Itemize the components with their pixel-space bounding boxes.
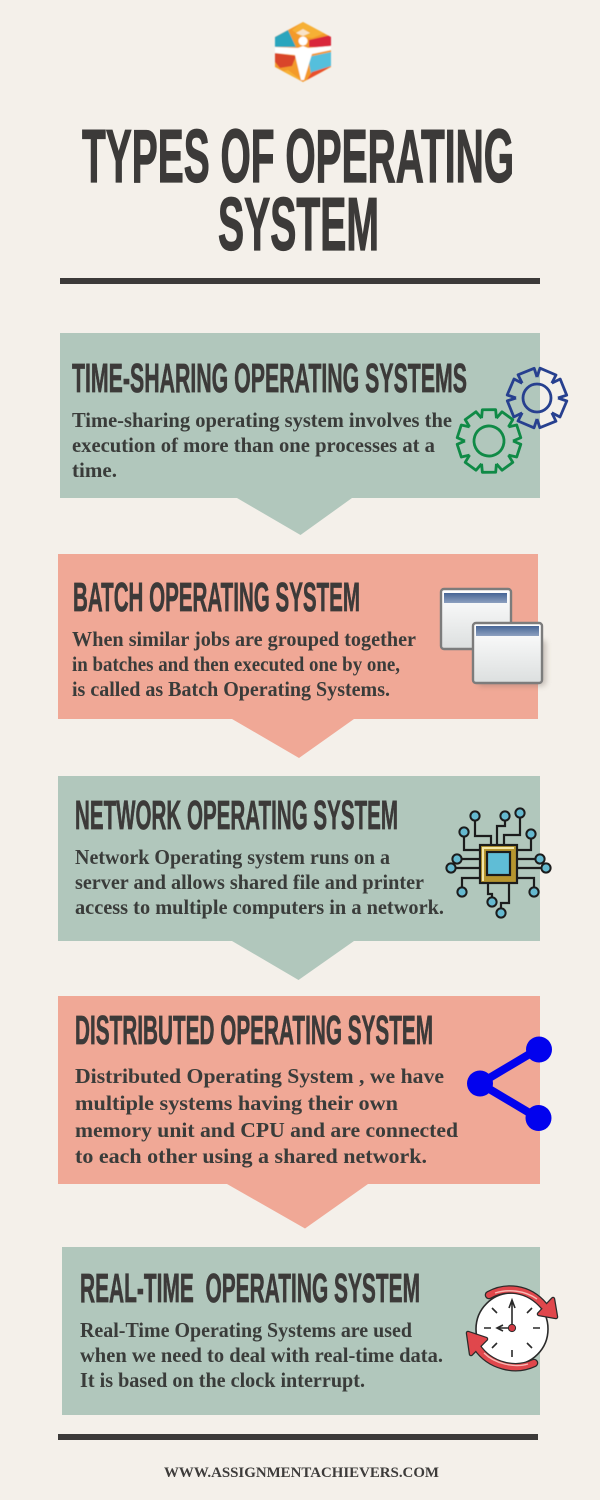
panel: real-time xyxy=(62,1247,556,1415)
body: network xyxy=(75,845,444,919)
icon: blue gear xyxy=(502,363,572,433)
body: time-sharing: Time-sharing operating system involves the xyxy=(72,408,452,432)
icon: clock with arrows xyxy=(468,1290,556,1367)
panel background with arrow xyxy=(58,554,538,758)
body: real-time: when we need to deal with real-time data. xyxy=(80,1343,443,1367)
body: batch: is called as Batch Operating Systems. xyxy=(72,677,390,701)
icon: green gear xyxy=(445,397,533,485)
panel background with arrow xyxy=(58,996,540,1228)
body: network: access to multiple computers in a network. xyxy=(75,895,444,919)
body: real-time: It is based on the clock interrupt. xyxy=(80,1368,365,1392)
body: network: server and allows shared file and printer xyxy=(75,870,424,894)
panel: network xyxy=(58,776,551,980)
top divider xyxy=(60,278,540,284)
title xyxy=(82,114,514,266)
panel: time-sharing xyxy=(60,333,572,535)
body: batch: When similar jobs are grouped together xyxy=(72,627,416,651)
body: distributed xyxy=(75,1064,458,1168)
body: distributed: Distributed Operating System , we have xyxy=(75,1064,444,1088)
body: time-sharing: execution of more than one processes at a xyxy=(72,433,435,457)
panel background with arrow xyxy=(58,776,540,980)
body: real-time: Real-Time Operating Systems are used xyxy=(80,1318,412,1342)
logo xyxy=(274,21,332,83)
icon: circuit chip xyxy=(446,808,551,918)
icon: windows xyxy=(441,589,546,686)
bottom divider xyxy=(58,1434,538,1440)
panel: distributed xyxy=(58,996,552,1228)
body: time-sharing xyxy=(72,408,452,482)
panel background xyxy=(62,1247,540,1415)
body: network: Network Operating system runs on a xyxy=(75,845,390,869)
body: batch: in batches and then executed one by one, xyxy=(72,652,400,676)
title: SYSTEM xyxy=(218,182,379,266)
icon: share xyxy=(467,1036,552,1131)
body: batch xyxy=(72,627,416,701)
body: distributed: multiple systems having their own xyxy=(75,1091,398,1115)
panel: batch xyxy=(58,554,546,758)
body: time-sharing: time. xyxy=(72,458,117,482)
panel background with arrow xyxy=(60,333,540,535)
body: distributed: memory unit and CPU and are connected xyxy=(75,1118,458,1142)
body: real-time xyxy=(80,1318,443,1392)
body: distributed: to each other using a shared network. xyxy=(75,1144,427,1168)
footer url: WWW.ASSIGNMENTACHIEVERS.COM xyxy=(164,1465,439,1481)
